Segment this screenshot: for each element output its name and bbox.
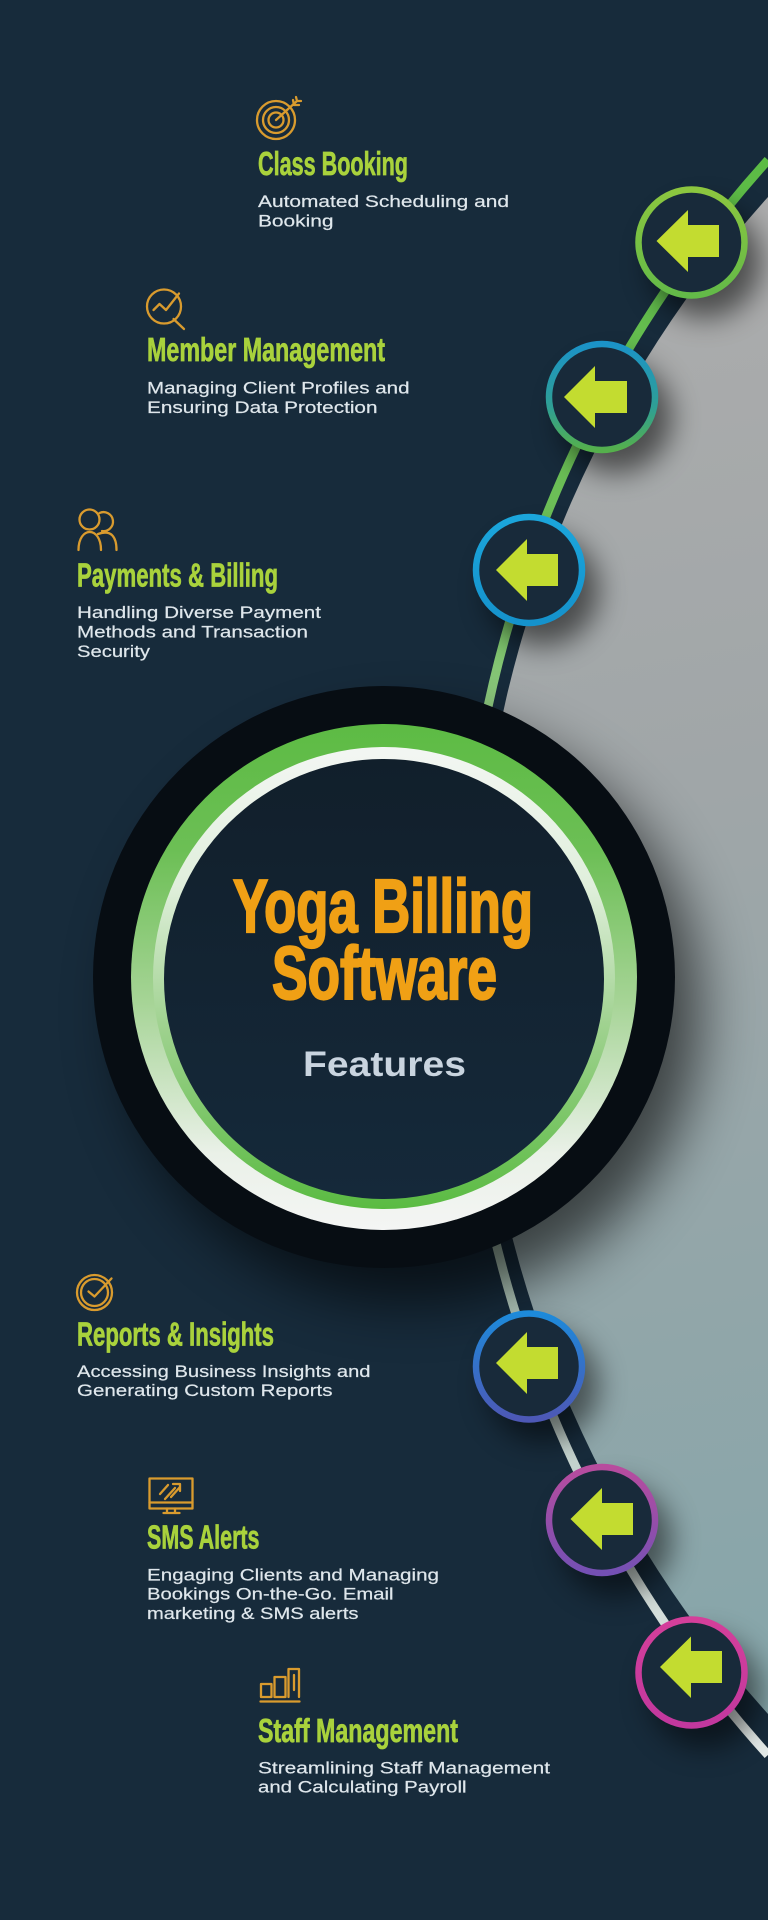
arrow badge: member management xyxy=(549,344,672,473)
description: Methods and Transaction xyxy=(77,624,308,642)
description xyxy=(147,380,410,417)
icon: target xyxy=(257,97,301,139)
description: Ensuring Data Protection xyxy=(147,399,378,417)
item: payments and billing xyxy=(77,510,322,661)
description xyxy=(77,1363,370,1400)
description xyxy=(147,1566,439,1623)
description: Managing Client Profiles and xyxy=(147,380,410,398)
description: Bookings On-the-Go. Email xyxy=(147,1586,394,1604)
arrow badge: payments xyxy=(476,517,599,646)
description: Engaging Clients and Managing xyxy=(147,1566,439,1584)
item: class booking xyxy=(257,97,509,230)
curved stripe xyxy=(461,160,768,1755)
arrow badge: sms alerts xyxy=(549,1467,672,1596)
description: marketing & SMS alerts xyxy=(147,1605,358,1623)
item: staff management xyxy=(258,1669,551,1796)
description: Security xyxy=(77,643,151,661)
arrow badge: staff management xyxy=(638,1620,761,1748)
icon: people xyxy=(78,510,116,550)
icon: magnifier chart xyxy=(147,290,184,329)
description: Streamlining Staff Management xyxy=(258,1760,551,1778)
subtitle: Features xyxy=(303,1045,466,1084)
description xyxy=(258,193,509,230)
central circle xyxy=(93,686,701,1303)
gray curved panel xyxy=(477,197,768,1714)
title xyxy=(233,864,533,1015)
arrow badge: reports xyxy=(476,1314,599,1442)
heading: Payments & Billing xyxy=(77,556,278,594)
heading: Member Management xyxy=(147,331,385,368)
icon: monitor xyxy=(150,1478,192,1513)
item: sms alerts xyxy=(147,1478,439,1623)
item: reports and insights xyxy=(77,1275,370,1400)
description: Automated Scheduling and xyxy=(258,193,509,211)
description: Accessing Business Insights and xyxy=(77,1363,370,1381)
title: Yoga Billing xyxy=(233,864,533,948)
icon: bar chart xyxy=(260,1669,300,1702)
heading: SMS Alerts xyxy=(147,1518,260,1556)
description: and Calculating Payroll xyxy=(258,1778,466,1796)
icon: check circle xyxy=(77,1275,112,1310)
heading: Reports & Insights xyxy=(77,1316,274,1352)
heading: Class Booking xyxy=(258,145,408,182)
heading: Staff Management xyxy=(258,1712,458,1749)
description: Generating Custom Reports xyxy=(77,1382,332,1400)
item: member management xyxy=(147,290,410,417)
description: Handling Diverse Payment xyxy=(77,604,322,622)
description xyxy=(77,604,322,661)
description: Booking xyxy=(258,212,334,230)
title: Software xyxy=(272,931,497,1015)
description xyxy=(258,1760,551,1796)
arrow badge: class booking xyxy=(638,190,761,318)
